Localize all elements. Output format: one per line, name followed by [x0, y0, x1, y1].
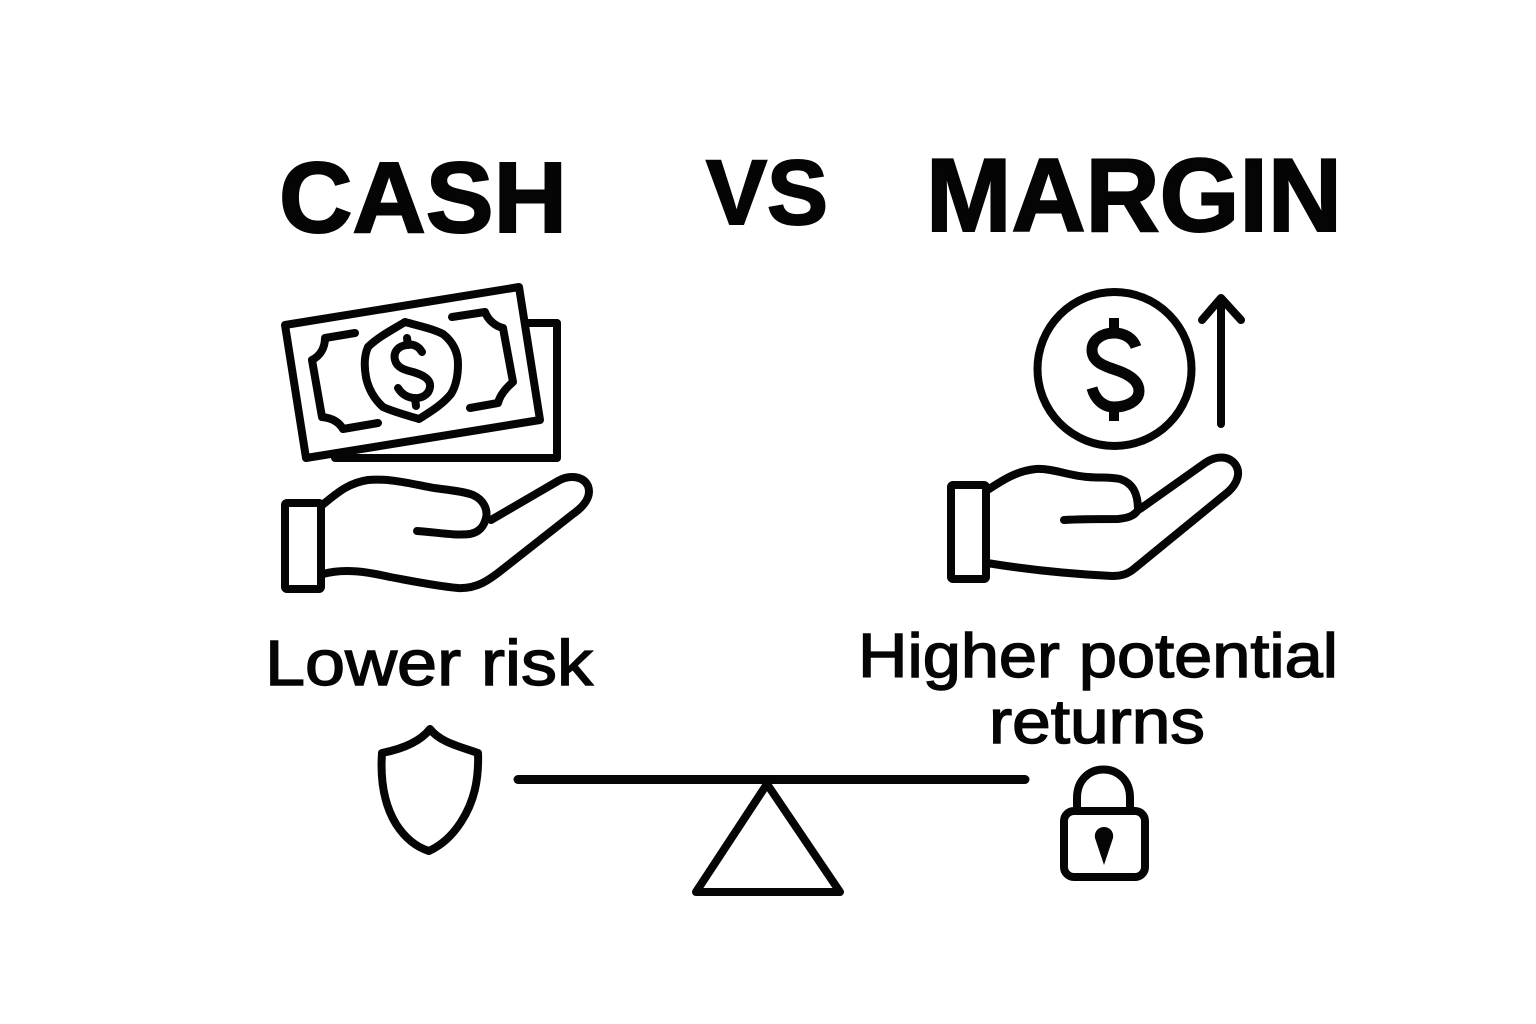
icon: hand holding coin — [951, 458, 1238, 579]
icon: balance scale — [518, 780, 1025, 892]
label: Higher potential returns — [858, 622, 1338, 757]
icon: banknotes — [285, 287, 557, 458]
label: Lower risk: Lower risk — [265, 627, 594, 699]
arrow: up — [1202, 298, 1241, 424]
icon: padlock — [1064, 770, 1145, 877]
icon: hand holding cash — [285, 477, 589, 589]
title: VS: VS — [706, 142, 828, 244]
icon: shield — [382, 729, 478, 851]
label: Higher potential returns: Higher potential — [858, 622, 1338, 691]
icon: dollar coin — [1038, 292, 1192, 446]
title: MARGIN: MARGIN — [926, 138, 1342, 254]
label: Higher potential returns: returns — [989, 688, 1205, 757]
title: CASH: CASH — [279, 142, 567, 254]
